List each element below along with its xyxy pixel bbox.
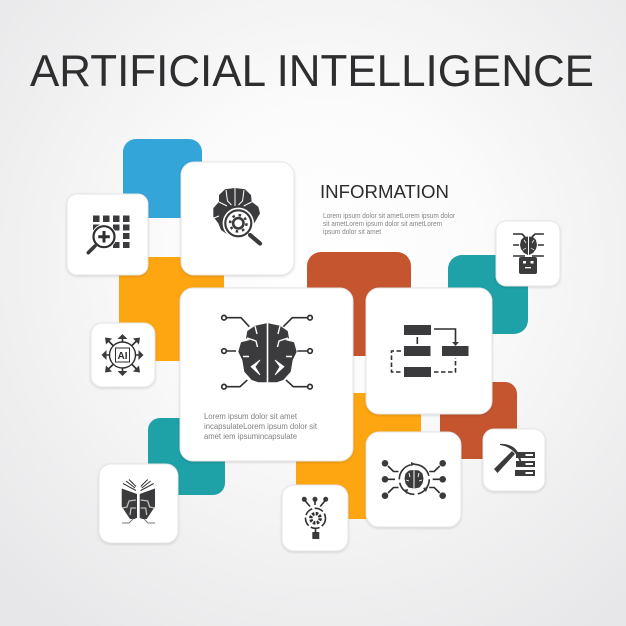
- text block: information body: Lorem ipsum dolor sit ametLorem ipsum dolor: [323, 211, 456, 220]
- panel: brain search card: [181, 162, 294, 275]
- title: ARTIFICIAL INTELLIGENCE: [30, 47, 594, 96]
- panel: gear network card: [282, 485, 348, 551]
- panel: brain cycle card: [366, 432, 461, 527]
- panel: robot brain card: [496, 221, 560, 286]
- text block: information body: sit ametLorem ipsum dolor sit ametLorem: [323, 219, 442, 228]
- panel: orange block left: [119, 257, 224, 361]
- icon: AI chip with arrows: AI: [118, 351, 128, 362]
- panel: grid search card: [67, 194, 148, 275]
- icon: gear with nodes: [302, 497, 328, 539]
- panel: blue block: [123, 139, 202, 218]
- text block: main body: incapsulateLorem ipsum dolor sit: [204, 421, 318, 431]
- panel: main card: [180, 288, 353, 461]
- icon: grid with magnifier: [88, 216, 130, 253]
- icon: book with brain: [122, 480, 155, 523]
- text block: information body: [323, 211, 456, 236]
- icon: flowchart: [392, 325, 468, 377]
- panel: AI chip card: [91, 323, 155, 387]
- text block: main body: [204, 411, 318, 441]
- icon: brain with circuits: [222, 315, 312, 389]
- panel: pickaxe data card: [483, 429, 545, 491]
- text block: main body: Lorem ipsum dolor sit amet: [204, 411, 298, 421]
- panel: book brain card: [99, 464, 178, 543]
- icon: robot with brain: [513, 233, 544, 274]
- panel: flowchart card: [366, 288, 492, 414]
- panel: red block top: [307, 252, 411, 356]
- icon: brain cycle network: [382, 460, 446, 499]
- text block: main body: amet iem ipsumincapsulate: [204, 431, 297, 441]
- panel: teal block left: [148, 418, 225, 495]
- panel: teal block right: [448, 255, 528, 334]
- icon: brain with gear magnifier: [213, 188, 260, 244]
- text block: information body: ipsum dolor sit amet: [323, 227, 381, 236]
- heading: information: INFORMATION: [320, 182, 449, 202]
- panel: orange block bottom: [296, 393, 421, 519]
- panel: red block right: [440, 382, 517, 459]
- icon: pickaxe with data rows: [494, 444, 535, 476]
